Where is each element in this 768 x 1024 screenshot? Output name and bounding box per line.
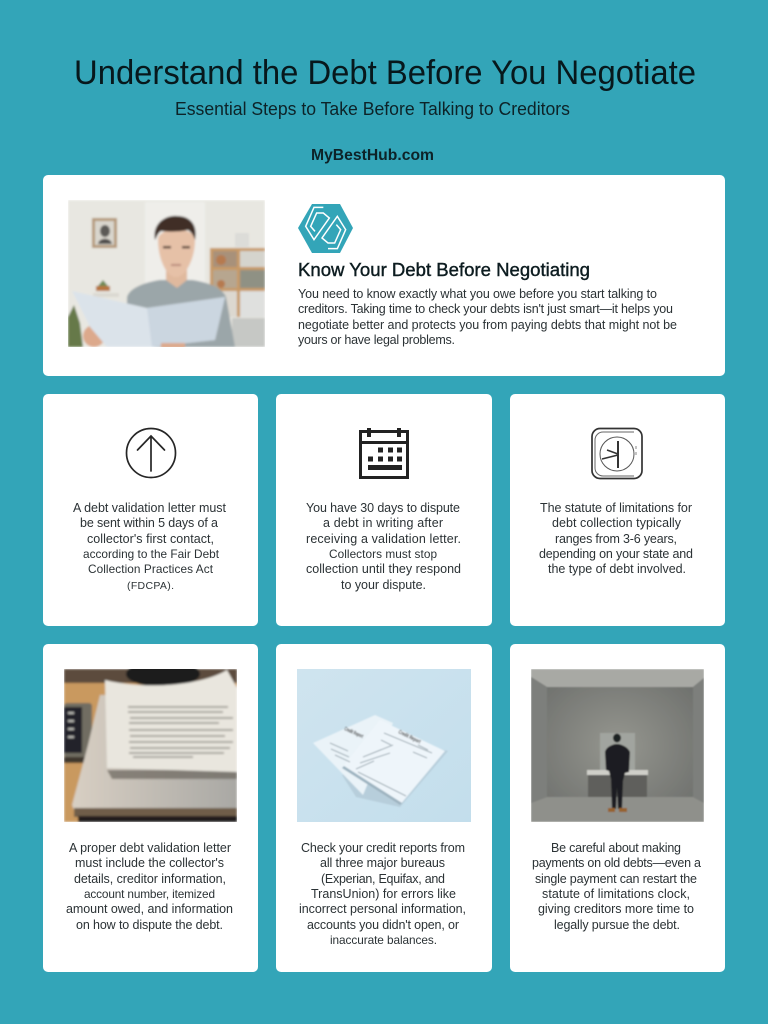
- text: accounts you didn't open, or: [307, 918, 459, 932]
- photo: man in grey room: [531, 669, 704, 822]
- text: amount owed, and information: [66, 902, 233, 916]
- text: depending on your state and: [539, 547, 693, 561]
- panel: 30 days to dispute: [276, 394, 492, 626]
- body text: [298, 287, 677, 347]
- text: all three major bureaus: [320, 856, 445, 870]
- text: (Experian, Equifax, and: [321, 872, 445, 886]
- text: You have 30 days to dispute: [306, 501, 460, 515]
- panel: proper validation letter: [43, 644, 258, 972]
- panel: credit reports: [276, 644, 492, 972]
- text: A debt validation letter must: [73, 501, 227, 515]
- brand name: MyBestHub.com: [311, 147, 434, 164]
- text: collector's first contact,: [87, 532, 214, 546]
- text: legally pursue the debt.: [554, 918, 680, 932]
- text: [66, 841, 233, 932]
- text: according to the Fair Debt: [83, 547, 220, 561]
- panel: old debts warning: [510, 644, 725, 972]
- text: Collection Practices Act: [88, 562, 214, 576]
- text: the type of debt involved.: [548, 562, 686, 576]
- text: The statute of limitations for: [540, 501, 692, 515]
- text: account number, itemized: [84, 887, 215, 901]
- panel: statute of limitations: [510, 394, 725, 626]
- text: must include the collector's: [75, 856, 224, 870]
- title: Understand the Debt Before You Negotiate: [74, 54, 696, 92]
- text: receiving a validation letter.: [306, 532, 461, 546]
- photo: credit report papers: [297, 669, 471, 822]
- icon: hexagon logo: [298, 204, 353, 253]
- text: giving creditors more time to: [538, 902, 694, 916]
- photo: man reading document: [68, 200, 265, 348]
- text: A proper debt validation letter: [69, 841, 231, 855]
- icon: calendar: [360, 428, 408, 478]
- text: payments on old debts—even a: [532, 856, 701, 870]
- text: statute of limitations clock,: [542, 887, 690, 901]
- heading: Know Your Debt Before Negotiating: [298, 260, 590, 280]
- text: Check your credit reports from: [301, 841, 465, 855]
- body text: creditors. Taking time to check your debts isn't just smart—it helps you: [298, 302, 673, 316]
- panel: validation letter deadline: [43, 394, 258, 626]
- text: single payment can restart the: [535, 872, 697, 886]
- text: (FDCPA).: [127, 580, 174, 592]
- text: incorrect personal information,: [299, 902, 466, 916]
- text: Be careful about making: [551, 841, 681, 855]
- text: [539, 501, 693, 576]
- text: [306, 501, 461, 592]
- photo: credit report papers: Credit Report: [397, 729, 421, 745]
- text: Collectors must stop: [329, 547, 437, 561]
- text: [299, 841, 466, 947]
- body text: yours or have legal problems.: [298, 333, 455, 347]
- body text: negotiate better and protects you from paying debts that might not be: [298, 318, 677, 332]
- text: TransUnion) for errors like: [311, 887, 456, 901]
- text: collection until they respond: [306, 562, 461, 576]
- text: to your dispute.: [341, 578, 426, 592]
- text: on how to dispute the debt.: [76, 918, 223, 932]
- text: ranges from 3-6 years,: [555, 532, 677, 546]
- photo: letter on laptop: [64, 661, 237, 822]
- icon: up arrow in circle: [126, 428, 176, 478]
- icon: square clock: [592, 428, 642, 478]
- body text: You need to know exactly what you owe before you start talking to: [298, 287, 657, 301]
- photo: credit report papers: Credit Report: [343, 726, 364, 740]
- panel: know your debt: [43, 175, 725, 376]
- text: a debt in writing after: [323, 516, 443, 530]
- subtitle: Essential Steps to Take Before Talking to Creditors: [175, 99, 570, 119]
- text: [73, 501, 227, 592]
- text: [532, 841, 701, 932]
- text: debt collection typically: [552, 516, 682, 530]
- text: be sent within 5 days of a: [80, 516, 218, 530]
- text: details, creditor information,: [74, 872, 226, 886]
- text: inaccurate balances.: [330, 933, 437, 947]
